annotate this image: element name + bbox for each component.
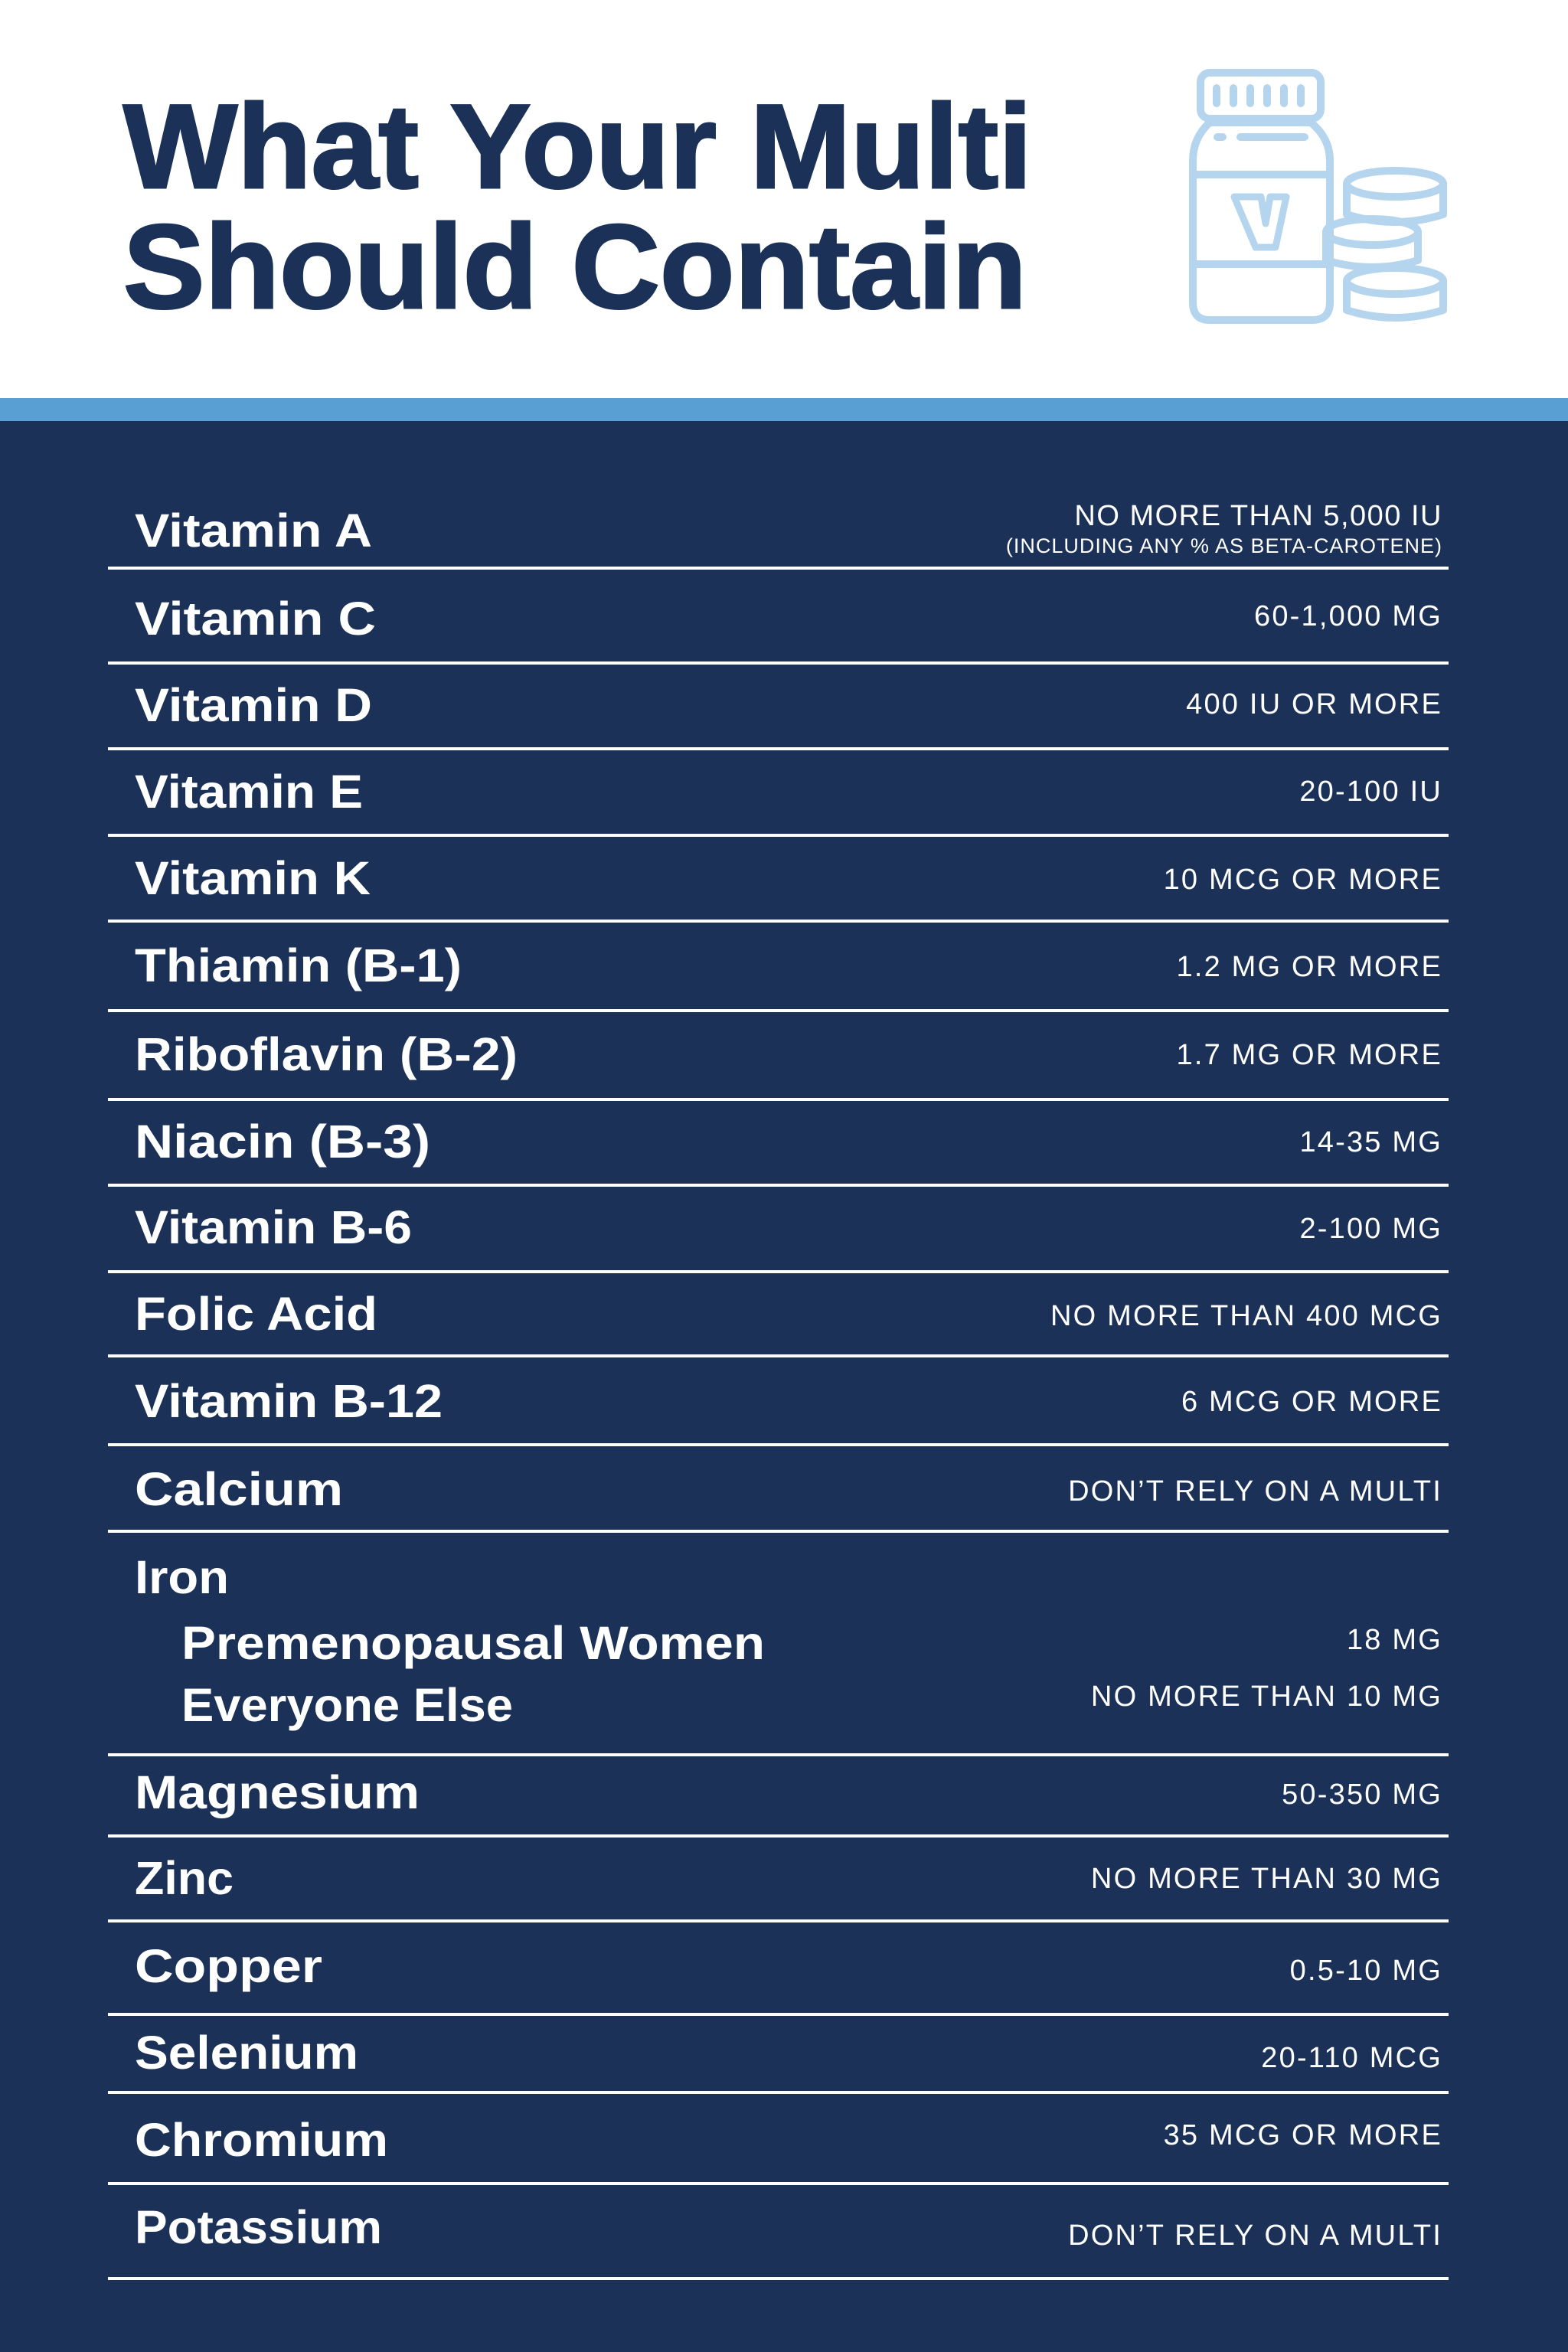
row: Magnesium bbox=[135, 1766, 1442, 1818]
row: Riboflavin: Riboflavin (B-2) bbox=[135, 1028, 518, 1080]
row: Thiamin: Thiamin (B-1) bbox=[135, 939, 462, 991]
row: Vitamin A: Vitamin A bbox=[135, 505, 372, 557]
row: Folic Acid bbox=[135, 1288, 1442, 1340]
row: Vitamin E: Vitamin E bbox=[135, 766, 363, 818]
title: What Your Multi bbox=[123, 80, 1032, 214]
row: Niacin: Niacin (B-3) bbox=[135, 1116, 430, 1168]
row: Selenium: 20-110 MCG bbox=[1261, 2042, 1442, 2074]
row: Magnesium: 50-350 MG bbox=[1282, 1779, 1442, 1811]
row: Vitamin A: (INCLUDING ANY % AS BETA-CAROTENE) bbox=[1006, 534, 1442, 557]
row: Calcium: DON’T RELY ON A MULTI bbox=[1068, 1475, 1442, 1508]
row: Vitamin C: 60-1,000 MG bbox=[1254, 600, 1442, 632]
row: Calcium: Calcium bbox=[135, 1463, 343, 1515]
row: Copper: 0.5-10 MG bbox=[1290, 1955, 1442, 1987]
row: Vitamin D bbox=[135, 679, 1442, 731]
row: Iron: Iron bbox=[135, 1551, 229, 1603]
row: Selenium: Selenium bbox=[135, 2027, 358, 2079]
row: Folic Acid: Folic Acid bbox=[135, 1288, 377, 1340]
row: Potassium: Potassium bbox=[135, 2201, 382, 2253]
row: Vitamin B-12: 6 MCG OR MORE bbox=[1181, 1386, 1442, 1418]
row: Chromium bbox=[135, 2114, 1442, 2166]
row: Thiamin bbox=[135, 939, 1442, 991]
icon: vitamin bottle and pills bbox=[1193, 73, 1443, 320]
row: Vitamin B-12 bbox=[135, 1375, 1442, 1427]
title bbox=[123, 80, 1032, 334]
row: Vitamin K: 10 MCG OR MORE bbox=[1164, 864, 1442, 896]
row: Vitamin B-6 bbox=[135, 1201, 1442, 1253]
row: Vitamin C: Vitamin C bbox=[135, 593, 376, 645]
row: Vitamin C bbox=[135, 593, 1442, 645]
row: Iron: 18 MG bbox=[1347, 1624, 1442, 1656]
row: Vitamin A: NO MORE THAN 5,000 IU bbox=[1074, 500, 1442, 532]
row: Iron: Premenopausal Women bbox=[181, 1617, 765, 1669]
row: Vitamin D: 400 IU OR MORE bbox=[1186, 688, 1442, 720]
accent stripe bbox=[0, 398, 1568, 421]
title: Should Contain bbox=[123, 201, 1027, 334]
row: Vitamin E: 20-100 IU bbox=[1299, 776, 1442, 808]
row: Riboflavin bbox=[135, 1028, 1442, 1080]
row: Chromium: 35 MCG OR MORE bbox=[1164, 2119, 1442, 2151]
row: Potassium: DON’T RELY ON A MULTI bbox=[1068, 2220, 1442, 2252]
row: Niacin: 14-35 MG bbox=[1299, 1126, 1442, 1158]
row: Calcium bbox=[135, 1463, 1442, 1515]
row: Vitamin B-12: Vitamin B-12 bbox=[135, 1375, 443, 1427]
row: Potassium bbox=[135, 2201, 1442, 2253]
row: Iron bbox=[135, 1551, 1442, 1731]
row: Vitamin B-6: 2-100 MG bbox=[1299, 1213, 1442, 1245]
row: Copper bbox=[135, 1940, 1442, 1992]
row: Zinc: NO MORE THAN 30 MG bbox=[1091, 1863, 1442, 1895]
row: Iron: NO MORE THAN 10 MG bbox=[1091, 1681, 1442, 1713]
row: Vitamin D: Vitamin D bbox=[135, 679, 372, 731]
row: Zinc bbox=[135, 1852, 1442, 1904]
row: Vitamin K: Vitamin K bbox=[135, 852, 371, 904]
header background bbox=[0, 0, 1568, 398]
row: Chromium: Chromium bbox=[135, 2114, 388, 2166]
row: Vitamin B-6: Vitamin B-6 bbox=[135, 1201, 412, 1253]
row: Vitamin A bbox=[135, 500, 1442, 557]
row: Riboflavin: 1.7 MG OR MORE bbox=[1176, 1039, 1442, 1071]
row: Niacin bbox=[135, 1116, 1442, 1168]
row: Vitamin E bbox=[135, 766, 1442, 818]
row: Copper: Copper bbox=[135, 1940, 322, 1992]
row: Vitamin K bbox=[135, 852, 1442, 904]
row: Thiamin: 1.2 MG OR MORE bbox=[1176, 951, 1442, 983]
row: Iron: Everyone Else bbox=[181, 1679, 513, 1731]
row dividers bbox=[108, 567, 1449, 2280]
row: Zinc: Zinc bbox=[135, 1852, 234, 1904]
row: Folic Acid: NO MORE THAN 400 MCG bbox=[1050, 1300, 1442, 1332]
row: Magnesium: Magnesium bbox=[135, 1766, 420, 1818]
row: Selenium bbox=[135, 2027, 1442, 2079]
